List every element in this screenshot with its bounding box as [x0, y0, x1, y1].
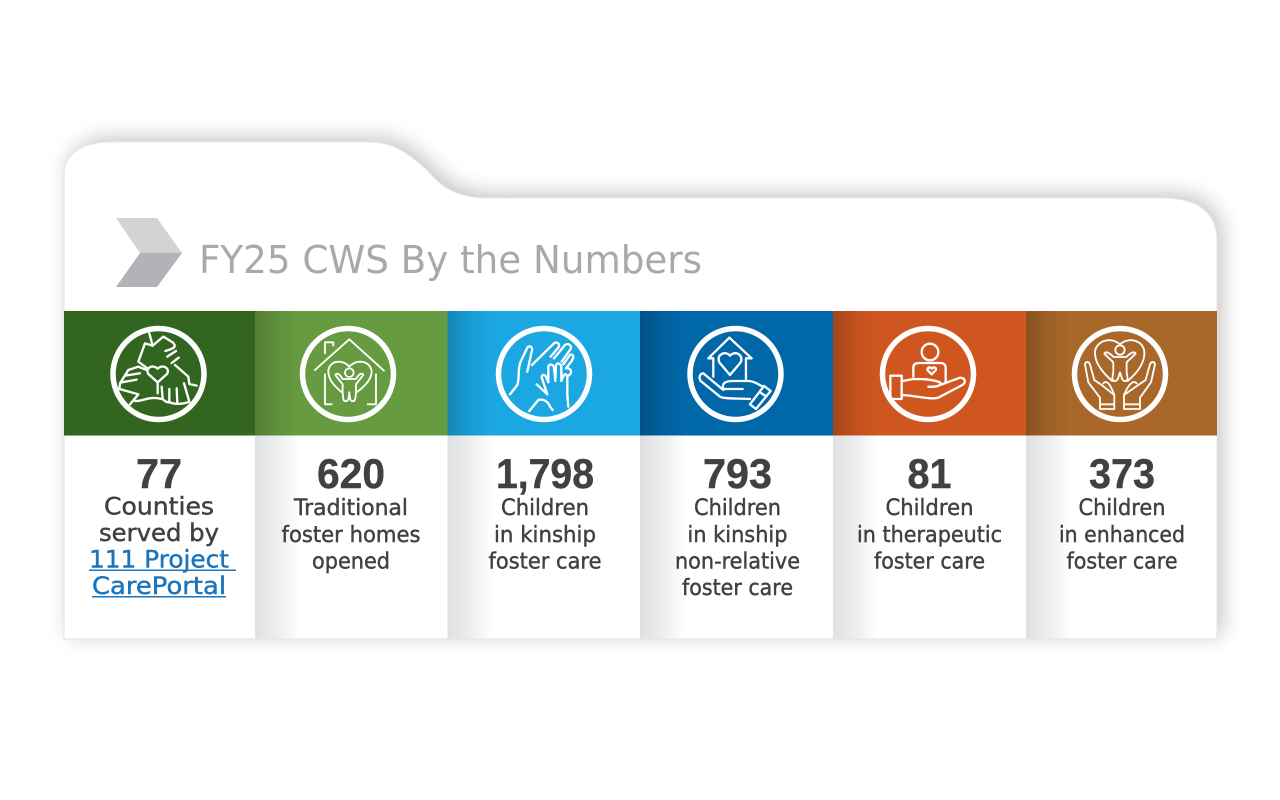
value: 373 [1089, 450, 1155, 497]
column shading [255, 436, 300, 638]
panel: kinship non-relative foster care [640, 311, 833, 638]
link: 111 Project CarePortal: 111 Project [89, 546, 229, 574]
icon: chevron [116, 218, 182, 287]
value: 81 [908, 450, 952, 497]
link: 111 Project CarePortal: CarePortal [92, 572, 226, 600]
colour band [640, 311, 833, 436]
label: served by [99, 519, 219, 547]
icon: joined hands with heart [113, 328, 204, 420]
panel: counties served [64, 311, 255, 600]
label [675, 495, 800, 601]
label [857, 495, 1002, 574]
folder card [64, 142, 1217, 639]
link: 111 Project CarePortal [89, 546, 236, 600]
label: non-relative [675, 548, 800, 574]
label: Traditional [293, 495, 408, 521]
band shading [640, 311, 685, 436]
colour band [255, 311, 448, 436]
label: foster homes [282, 522, 420, 548]
panel: therapeutic foster care [833, 311, 1026, 638]
label: Children [501, 495, 589, 521]
column shading [1026, 436, 1071, 638]
label: Children [886, 495, 974, 521]
label: in kinship [688, 522, 788, 548]
card shadow [69, 138, 1222, 635]
panel: kinship foster care [448, 311, 640, 638]
label: opened [312, 548, 390, 574]
band shading [1026, 311, 1071, 436]
value: 620 [317, 450, 385, 497]
icon: hands lifting child in heart [1074, 328, 1166, 420]
label [99, 492, 219, 547]
value: 1,798 [496, 450, 594, 497]
title: FY25 CWS By the Numbers [199, 238, 702, 283]
label: in enhanced [1059, 522, 1185, 548]
colour band [448, 311, 640, 436]
label: Children [694, 495, 781, 521]
colour band [64, 311, 255, 436]
band shading [833, 311, 878, 436]
icon: adult and child hands [498, 328, 590, 420]
icon: hand holding house [690, 328, 781, 420]
label: foster care [682, 575, 793, 601]
value: 77 [136, 450, 182, 497]
column shading [833, 436, 878, 638]
label [282, 495, 420, 574]
label: Counties [104, 492, 214, 520]
label: foster care [874, 548, 985, 574]
label: foster care [488, 548, 602, 574]
label [1059, 495, 1185, 574]
heading [116, 218, 702, 287]
label: Children [1078, 495, 1166, 521]
band shading [448, 311, 492, 436]
band shading [255, 311, 300, 436]
icon: house with heart and child [302, 328, 394, 420]
colour band [833, 311, 1026, 436]
value: 793 [703, 450, 772, 497]
colour band [1026, 311, 1217, 436]
panel: traditional foster homes [255, 311, 448, 638]
label: in kinship [494, 522, 596, 548]
label: foster care [1066, 548, 1178, 574]
label [488, 495, 602, 574]
icon: hand holding person [882, 328, 974, 420]
panel: enhanced foster care [1026, 311, 1217, 638]
label: in therapeutic [857, 522, 1002, 548]
column shading [640, 436, 685, 638]
column shading [448, 436, 492, 638]
